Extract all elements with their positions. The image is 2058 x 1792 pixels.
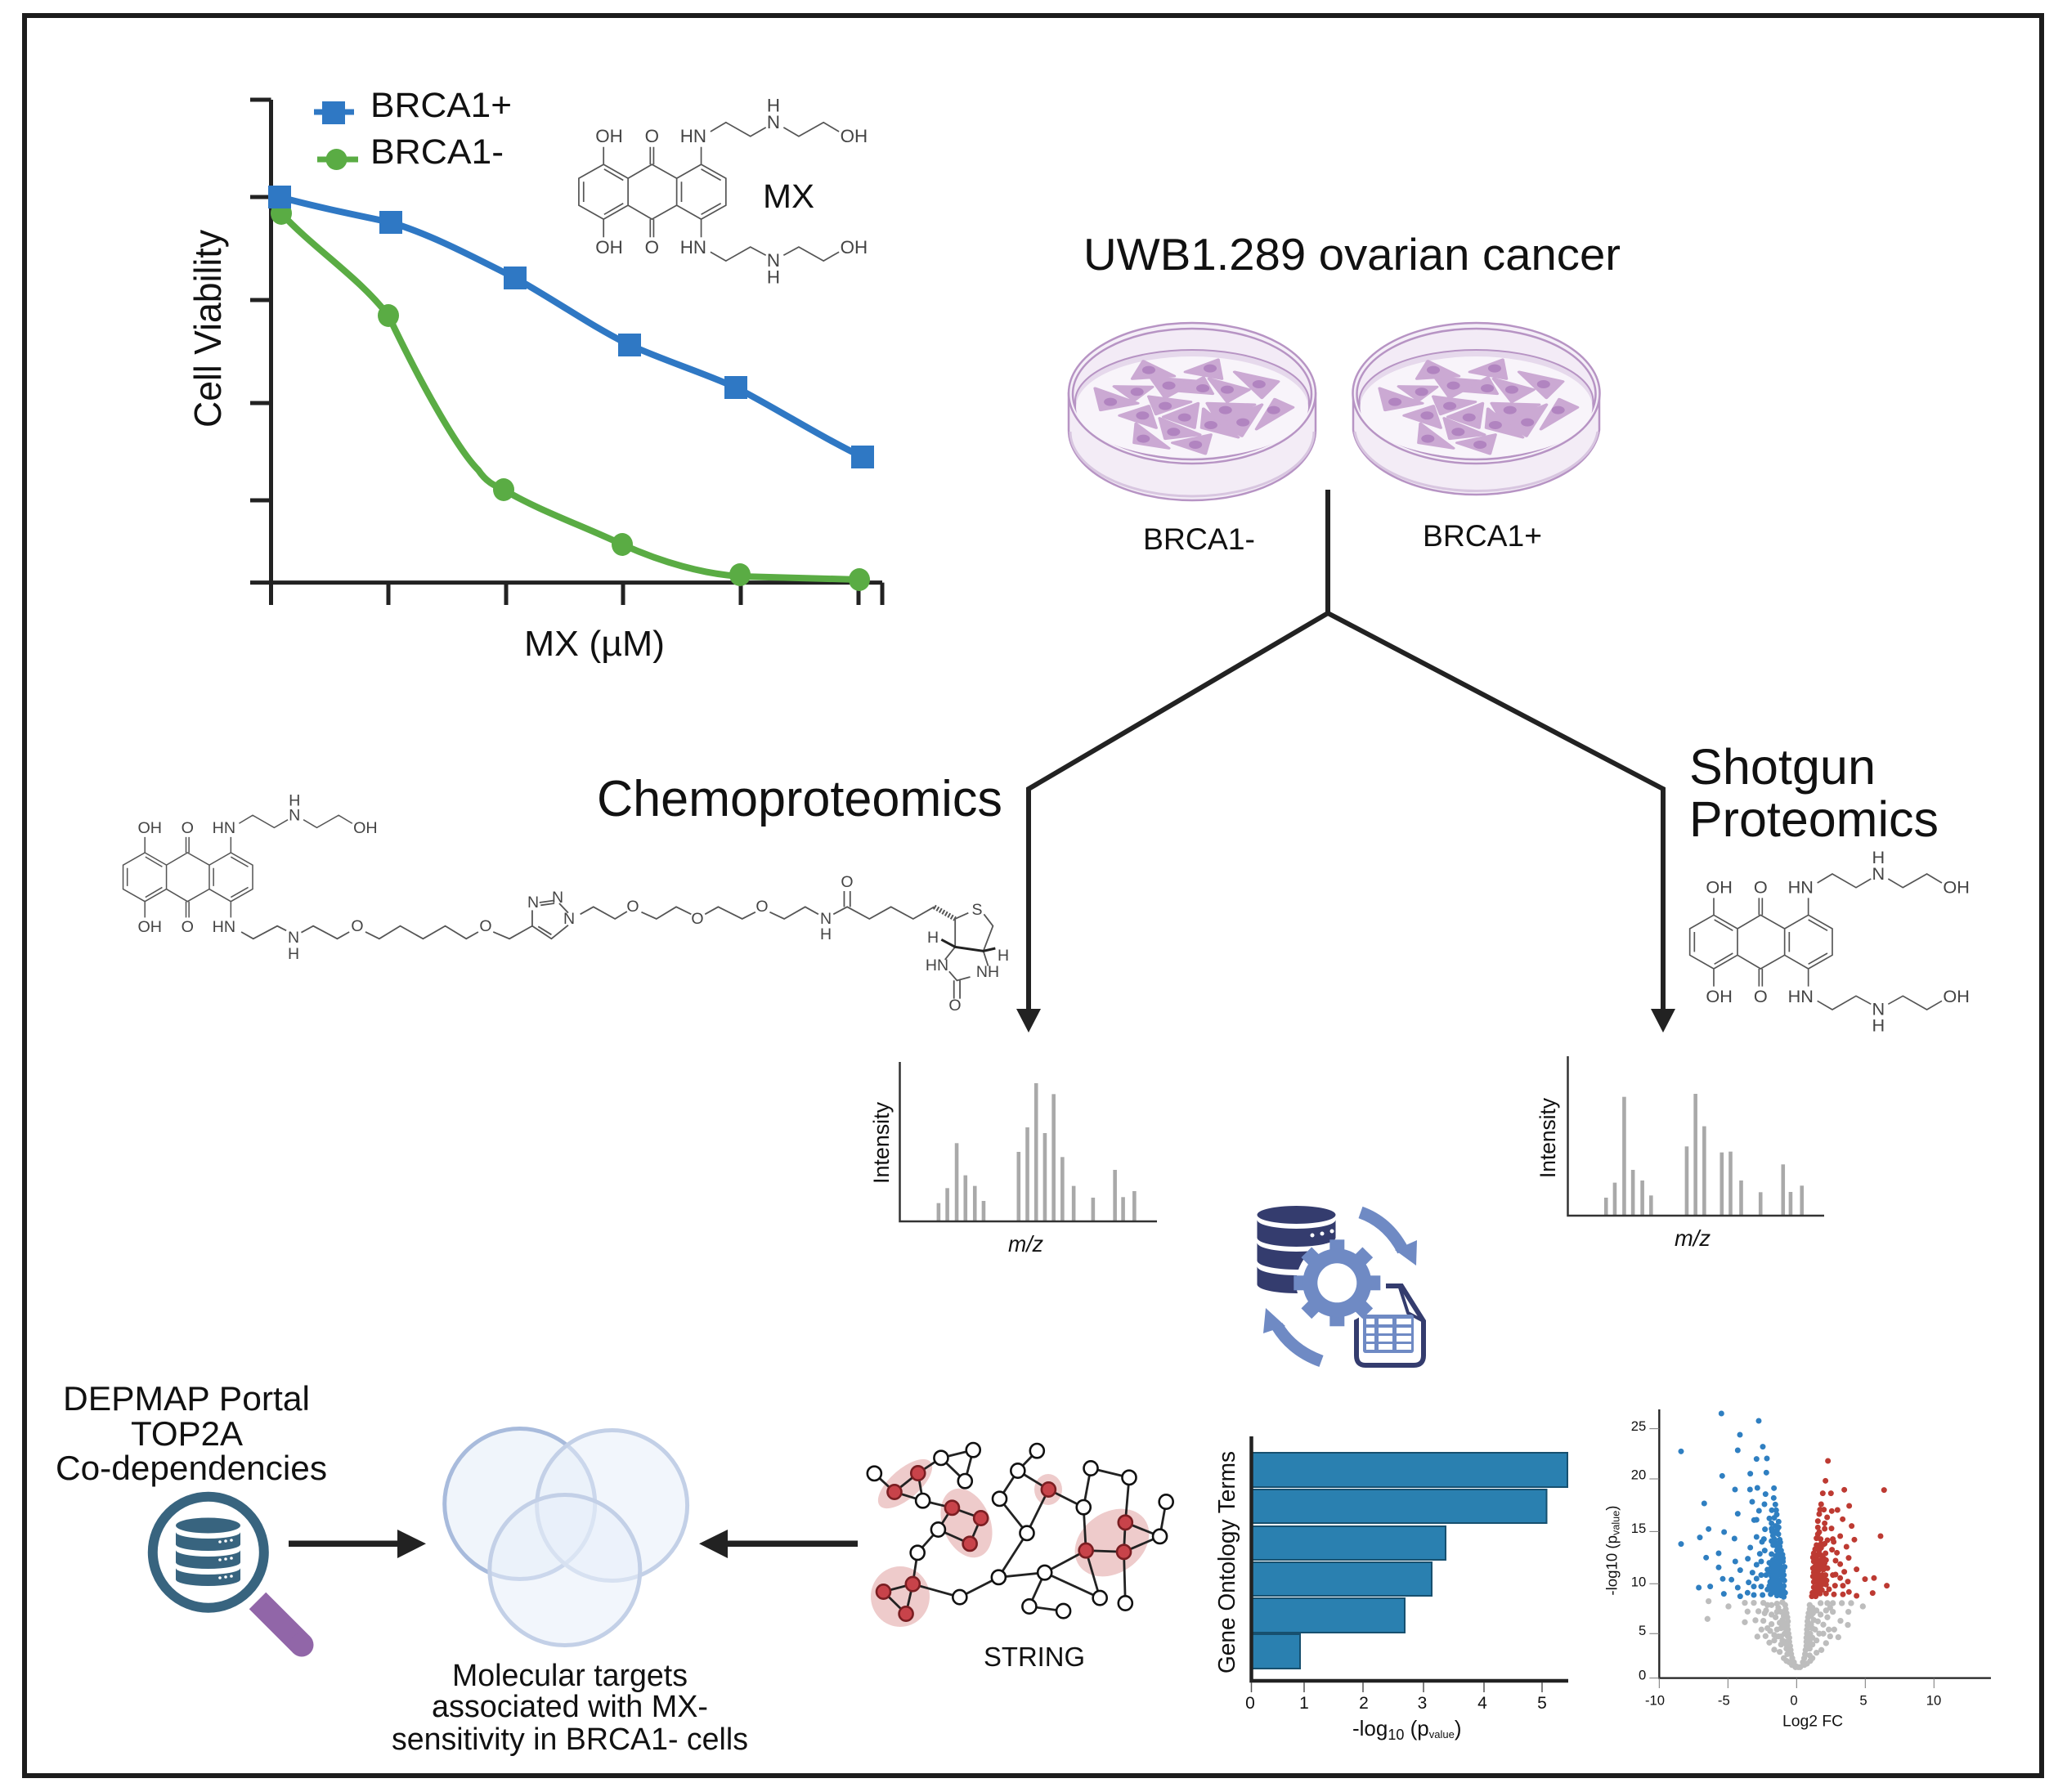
legend: BRCA1+ xyxy=(370,86,512,125)
molecule: MX shotgun proteomics: OH xyxy=(1943,877,1970,898)
text: molecular targets caption: associated with MX- xyxy=(432,1690,708,1724)
molecule: biotinylated MX chemoproteomics probe: N xyxy=(563,910,575,928)
tick labels: 5 xyxy=(1537,1694,1547,1713)
white nodes xyxy=(868,1443,1173,1618)
molecule: MX structure top: HN xyxy=(680,237,706,258)
y axis title: -log10 (p xyxy=(1603,1535,1621,1596)
molecule: biotinylated MX chemoproteomics probe: N xyxy=(820,910,832,928)
molecule: biotinylated MX chemoproteomics probe: OH xyxy=(137,819,162,837)
label: STRING: STRING xyxy=(984,1642,1085,1672)
x tick labels: 5 xyxy=(1859,1693,1867,1709)
molecule: biotinylated MX chemoproteomics probe: H xyxy=(820,925,832,943)
x tick labels: 0 xyxy=(1790,1693,1798,1709)
molecule: MX structure top: OH xyxy=(595,237,623,258)
arrow: DEPMAP to targets xyxy=(289,1530,426,1558)
molecule: biotinylated MX chemoproteomics probe: HN xyxy=(926,956,948,974)
molecule: biotinylated MX chemoproteomics probe: H xyxy=(927,929,939,947)
tick labels: 3 xyxy=(1418,1694,1427,1713)
x axis title: (p xyxy=(1404,1716,1429,1740)
molecule: biotinylated MX chemoproteomics probe: HN xyxy=(213,819,235,837)
molecule: biotinylated MX chemoproteomics probe: H xyxy=(998,947,1009,965)
chart: STRING network xyxy=(868,1443,1173,1627)
molecule: MX shotgun proteomics: OH xyxy=(1706,986,1733,1006)
chart: shotgun mass spectrum: Intensity xyxy=(1536,1098,1560,1178)
molecule: biotinylated MX chemoproteomics probe: O xyxy=(948,997,962,1015)
heading: DEPMAP Portal TOP2A Co-dependencies: TOP2A xyxy=(131,1414,243,1453)
molecule: MX shotgun proteomics: HN xyxy=(1788,877,1814,898)
y tick labels xyxy=(1631,1418,1646,1682)
molecule: biotinylated MX chemoproteomics probe: O xyxy=(691,910,704,928)
cells xyxy=(1095,360,1293,454)
heading: DEPMAP Portal TOP2A Co-dependencies: DEPMAP Portal xyxy=(63,1379,310,1418)
heading: Shotgun Proteomics: Shotgun xyxy=(1689,739,1876,795)
y tick labels: 20 xyxy=(1631,1467,1646,1483)
y tick labels: 15 xyxy=(1631,1521,1646,1536)
molecule: biotinylated MX chemoproteomics probe: O xyxy=(351,917,364,935)
chart: chemoproteomics mass spectrum: m/z xyxy=(1008,1231,1043,1257)
axes xyxy=(1251,1436,1568,1681)
molecule: MX shotgun proteomics: HN xyxy=(1788,986,1814,1006)
heading: DEPMAP Portal TOP2A Co-dependencies: Co-dependencies xyxy=(56,1449,327,1487)
label: dish BRCA1+: BRCA1+ xyxy=(1423,519,1542,553)
red nodes xyxy=(877,1466,1132,1621)
series: BRCA1+ blue curve xyxy=(268,186,874,468)
molecule: MX shotgun proteomics: N xyxy=(1872,999,1885,1019)
label: MX: MX xyxy=(763,177,814,215)
molecule: biotinylated MX chemoproteomics probe: H xyxy=(289,791,300,809)
y axis title: ) xyxy=(1603,1506,1621,1511)
chart: shotgun mass spectrum xyxy=(1536,1056,1824,1251)
y axis title: Cell Viability xyxy=(186,230,229,428)
icon: magnifying glass over database xyxy=(153,1497,314,1656)
highlighted clusters xyxy=(870,1451,1162,1627)
molecule: biotinylated MX chemoproteomics probe: O xyxy=(841,873,854,891)
y tick labels: 0 xyxy=(1639,1667,1646,1682)
molecule: MX shotgun proteomics: O xyxy=(1754,986,1768,1006)
molecule: MX shotgun proteomics: N xyxy=(1872,863,1885,884)
tick labels: 2 xyxy=(1359,1694,1369,1713)
tick labels: 0 xyxy=(1245,1694,1255,1713)
heading: Shotgun Proteomics xyxy=(1689,739,1939,847)
chart: shotgun mass spectrum: m/z xyxy=(1675,1225,1711,1251)
cycle arrows xyxy=(1263,1212,1417,1361)
molecule: MX shotgun proteomics: OH xyxy=(1943,986,1970,1006)
heading: DEPMAP Portal TOP2A Co-dependencies xyxy=(56,1379,327,1487)
molecule: biotinylated MX chemoproteomics probe: H xyxy=(288,945,299,963)
molecule: biotinylated MX chemoproteomics probe: O xyxy=(182,918,194,936)
tick labels: 1 xyxy=(1299,1694,1309,1713)
molecule: biotinylated MX chemoproteomics probe: O xyxy=(182,819,194,837)
molecule: biotinylated MX chemoproteomics probe: NH xyxy=(976,963,999,981)
chart: chemoproteomics mass spectrum xyxy=(869,1062,1157,1257)
molecule: biotinylated MX chemoproteomics probe xyxy=(123,791,1009,1015)
panel: BRCA1- petri dish xyxy=(1069,323,1316,500)
molecule: MX structure top: H xyxy=(767,267,780,287)
molecule: MX shotgun proteomics xyxy=(1690,847,1970,1036)
text: molecular targets caption: sensitivity in BRCA1- cells xyxy=(392,1723,748,1757)
molecule: MX shotgun proteomics: O xyxy=(1754,877,1768,898)
molecule: biotinylated MX chemoproteomics probe: N xyxy=(288,929,299,947)
molecule: biotinylated MX chemoproteomics probe: OH xyxy=(353,819,378,837)
network edges xyxy=(874,1450,1166,1614)
cells xyxy=(1379,360,1577,454)
red dots xyxy=(1812,1461,1887,1597)
axes xyxy=(1659,1409,1991,1678)
molecule: biotinylated MX chemoproteomics probe: N xyxy=(552,889,563,907)
chart: Venn diagram of molecular targets xyxy=(445,1429,688,1645)
series: BRCA1- green curve xyxy=(271,202,870,591)
tick labels xyxy=(1245,1694,1547,1713)
molecule: MX shotgun proteomics: H xyxy=(1872,847,1885,867)
icon: data analysis (database, gear, spreadsheet) xyxy=(1258,1206,1424,1365)
heading: Shotgun Proteomics: Proteomics xyxy=(1689,791,1939,847)
x tick labels: 10 xyxy=(1926,1693,1941,1709)
molecule: MX shotgun proteomics: H xyxy=(1872,1015,1885,1036)
legend: BRCA1- xyxy=(370,132,504,172)
blue dots xyxy=(1681,1413,1785,1597)
y axis title: Gene Ontology Terms xyxy=(1214,1451,1240,1673)
y tick labels: 10 xyxy=(1631,1574,1646,1589)
molecule: biotinylated MX chemoproteomics probe: N xyxy=(527,894,539,912)
y tick labels: 5 xyxy=(1639,1623,1646,1638)
molecule: biotinylated MX chemoproteomics probe: N xyxy=(289,807,300,825)
heading: Chemoproteomics: Chemoproteomics xyxy=(597,771,1002,827)
chart: gene ontology bar chart xyxy=(1214,1436,1568,1743)
arrow: branching workflow tree xyxy=(1016,490,1675,1033)
tick labels: 4 xyxy=(1477,1694,1487,1713)
molecule: MX structure top: O xyxy=(645,126,659,146)
spreadsheet document xyxy=(1356,1286,1424,1365)
x tick labels: -10 xyxy=(1645,1693,1665,1709)
molecule: MX structure top: N xyxy=(767,112,780,132)
arrow: STRING to targets xyxy=(699,1530,858,1558)
grey dots xyxy=(1707,1602,1863,1667)
molecule: MX structure top: O xyxy=(645,237,659,258)
text: molecular targets caption xyxy=(392,1659,748,1757)
x tick labels xyxy=(1645,1693,1941,1709)
x axis title: -log xyxy=(1352,1716,1388,1740)
chart axes xyxy=(250,100,882,605)
text: molecular targets caption: Molecular targets xyxy=(452,1659,688,1693)
database xyxy=(1258,1206,1336,1293)
molecule: MX structure top: H xyxy=(767,96,780,115)
gear xyxy=(1294,1239,1380,1326)
panel: BRCA1+ petri dish xyxy=(1352,323,1599,495)
chart: chemoproteomics mass spectrum: Intensity xyxy=(869,1102,894,1184)
molecule: MX shotgun proteomics: OH xyxy=(1706,877,1733,898)
molecule: MX structure top: OH xyxy=(595,126,623,146)
molecule: MX structure top: OH xyxy=(841,237,868,258)
molecule: biotinylated MX chemoproteomics probe: O xyxy=(626,898,639,916)
molecule: MX structure top: OH xyxy=(841,126,868,146)
molecule: biotinylated MX chemoproteomics probe: HN xyxy=(213,918,235,936)
x axis title: ) xyxy=(1455,1716,1461,1740)
molecule: biotinylated MX chemoproteomics probe: OH xyxy=(137,918,162,936)
molecule: MX structure top: HN xyxy=(680,126,706,146)
x tick labels: -5 xyxy=(1718,1693,1730,1709)
chart: volcano plot xyxy=(1603,1409,1991,1731)
y axis title: value xyxy=(1610,1511,1621,1535)
title: UWB1.289 ovarian cancer: UWB1.289 ovarian cancer xyxy=(1083,229,1621,280)
molecule: biotinylated MX chemoproteomics probe: O xyxy=(479,917,492,935)
molecule: biotinylated MX chemoproteomics probe: S xyxy=(971,901,983,919)
molecule: MX structure top: N xyxy=(767,250,780,271)
molecule: biotinylated MX chemoproteomics probe: O xyxy=(755,898,769,916)
bars xyxy=(1252,1453,1567,1669)
x axis title: MX (µM) xyxy=(524,624,665,664)
label: dish BRCA1-: BRCA1- xyxy=(1143,522,1255,556)
y tick labels: 25 xyxy=(1631,1418,1646,1434)
legend xyxy=(314,86,512,172)
x axis title: 10 xyxy=(1388,1727,1404,1743)
molecule: MX structure top xyxy=(579,96,868,287)
x axis title: value xyxy=(1429,1728,1455,1740)
x axis title: Log2 FC xyxy=(1782,1714,1843,1731)
panel: cell viability chart xyxy=(186,86,882,664)
